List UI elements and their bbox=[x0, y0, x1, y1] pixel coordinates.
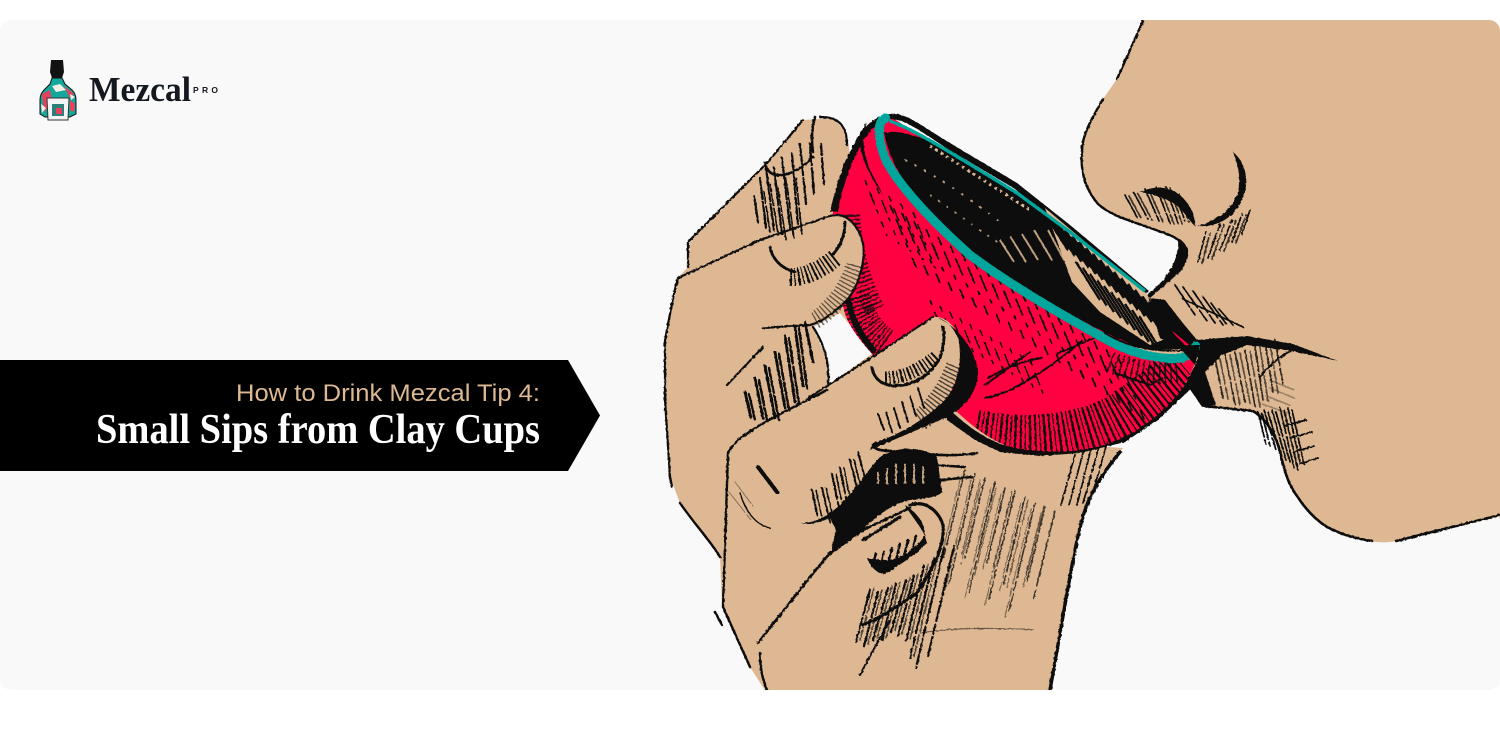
lips and chin shading bbox=[1150, 285, 1338, 470]
clay cup bbox=[830, 114, 1212, 456]
gap between fingers bbox=[813, 313, 873, 385]
icon: mezcal bottle bbox=[40, 60, 76, 120]
black shadow under thumb bbox=[800, 449, 942, 556]
cup interior tan highlights bbox=[905, 146, 1190, 360]
illustration: hand sipping from a clay cup bbox=[665, 15, 1500, 695]
cup outlines and dark shadows bbox=[830, 114, 1212, 456]
cup shading bbox=[846, 180, 1185, 440]
nostril bbox=[1125, 152, 1250, 298]
logo: Mezcal Pro bbox=[40, 60, 218, 120]
hand contour lines bbox=[665, 117, 1120, 690]
hand hatching bbox=[729, 144, 1107, 668]
heading banner bbox=[0, 360, 600, 471]
logo wordmark: Mezcal bbox=[89, 70, 191, 109]
ink at the meeting of lips and cup bbox=[1148, 296, 1200, 365]
heading: Small Sips from Clay Cups bbox=[96, 407, 540, 453]
cup dark interior bbox=[884, 132, 1190, 352]
hand bbox=[665, 118, 1123, 695]
logo superscript PRO: PRO bbox=[193, 85, 218, 95]
fingers over the cup bbox=[665, 117, 1120, 690]
cup teal rim bbox=[879, 118, 1196, 358]
face profile bbox=[1082, 15, 1500, 542]
cup red body bbox=[833, 116, 1198, 453]
arrow banner shape bbox=[0, 360, 600, 471]
subheading: How to Drink Mezcal Tip 4: bbox=[236, 380, 540, 407]
